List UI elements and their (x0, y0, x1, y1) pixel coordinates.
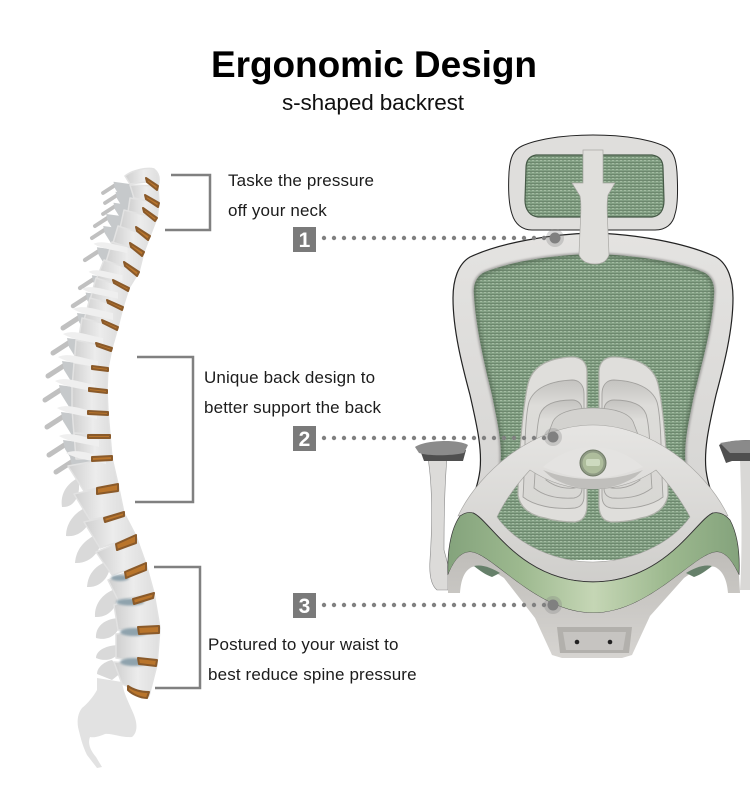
leader line 1 (324, 236, 545, 240)
lumbar bracket (546, 408, 640, 440)
number badge 1 (293, 227, 316, 252)
text: waist: Postured to your waist to (208, 635, 399, 654)
subtitle: s-shaped backrest (282, 90, 465, 115)
headrest (509, 135, 678, 230)
lower mesh (497, 480, 690, 560)
base socket (557, 627, 632, 653)
number badge 2: 2 (299, 428, 310, 451)
text: back: Unique back design to (204, 368, 375, 387)
arch shadow line (473, 513, 713, 582)
text: waist: best reduce spine pressure (208, 665, 417, 684)
dark seat mesh left (474, 565, 500, 577)
transverse plates (55, 242, 128, 464)
marker 3 (544, 596, 562, 614)
left armrest (415, 441, 468, 590)
bracket: waist (154, 567, 200, 688)
text: waist (208, 635, 417, 684)
text: neck: Taske the pressure (228, 171, 374, 190)
text: neck (228, 171, 374, 220)
text: back: better support the back (204, 398, 381, 417)
spine illustration (45, 168, 160, 768)
bracket: back (135, 357, 193, 502)
number badge 3 (293, 593, 316, 618)
bridge underside (543, 470, 643, 489)
text: neck: off your neck (228, 201, 327, 220)
lower frame and legs (448, 552, 740, 658)
dark seat mesh right (686, 565, 712, 577)
text: back (204, 368, 381, 417)
sacrum and coccyx (78, 678, 136, 768)
backrest mesh (471, 252, 717, 464)
headrest post (572, 150, 615, 264)
number badge 1: 1 (299, 229, 311, 252)
vertebral bodies (68, 168, 160, 696)
intervertebral discs (88, 178, 159, 698)
backrest frame (453, 233, 733, 505)
bridge lens (543, 447, 643, 478)
green seat band (448, 512, 739, 613)
number badge 2 (293, 426, 316, 451)
callout 2 (293, 426, 562, 451)
disc shadows (111, 575, 148, 666)
lumbar pad: left (518, 357, 587, 522)
leader line 3 (324, 603, 545, 607)
lumbar pad: right (599, 357, 668, 522)
bracket: neck (165, 175, 210, 230)
callout 3 (293, 593, 562, 618)
arch support (458, 425, 728, 582)
marker 2 (544, 428, 562, 446)
marker 1 (546, 229, 564, 247)
spinal processes (45, 182, 135, 680)
adjustment knob (580, 450, 606, 476)
number badge 3: 3 (299, 595, 310, 618)
leader line 2 (324, 436, 545, 440)
office chair (415, 135, 750, 658)
title: Ergonomic Design (211, 44, 537, 85)
callout 1 (293, 227, 564, 252)
right armrest (719, 440, 750, 590)
